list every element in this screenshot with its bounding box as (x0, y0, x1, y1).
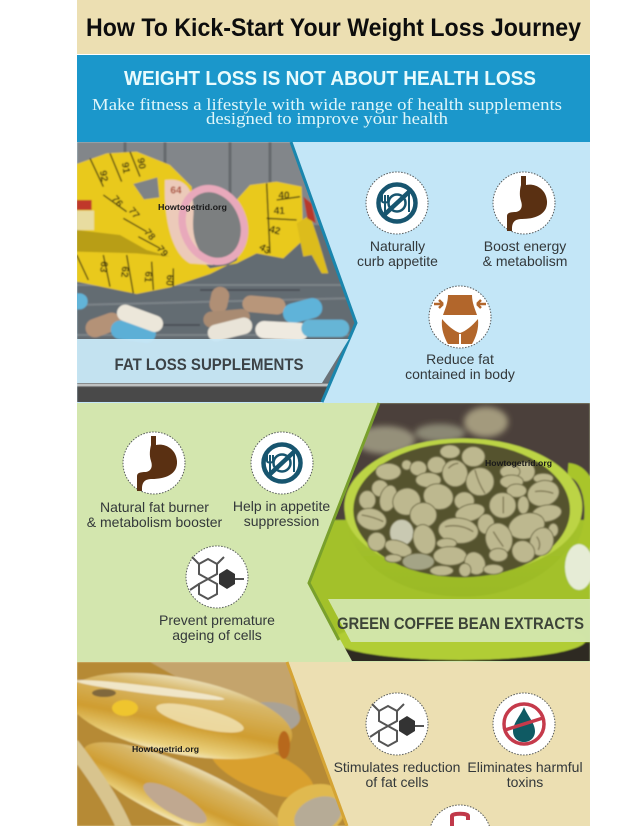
icon: no toxins drop (493, 693, 555, 755)
label: natural fat burner: & metabolism booster (87, 514, 223, 530)
watermark: Howtogetrid.org (132, 744, 199, 754)
photo border (287, 662, 347, 826)
header subtitle (92, 95, 562, 128)
icon: no eating plate (366, 172, 428, 234)
tape coordinates at 3x: 79 (154, 244, 170, 260)
label: help in appetite: Help in appetite (233, 498, 330, 514)
label: naturally curb appetite: Naturally (370, 238, 425, 254)
title: How To Kick-Start Your Weight Loss Journey (86, 14, 581, 42)
tape coordinates at 3x: 61 (141, 271, 153, 283)
label: help in appetite: suppression (244, 513, 319, 529)
tape coordinates at 3x: 76 (109, 194, 125, 210)
tape coordinates at 3x: 64 (170, 185, 182, 196)
label: stimulates reduction: of fat cells (365, 774, 429, 790)
label: boost energy: Boost energy (484, 238, 566, 254)
label: eliminates harmful: Eliminates harmful (467, 759, 583, 775)
banner: fat loss supplements: FAT LOSS SUPPLEMENTS (114, 355, 304, 374)
tape coordinates at 3x: 92 (97, 170, 110, 183)
header band (77, 55, 590, 142)
icon: stomach (493, 172, 555, 234)
tape coordinates at 3x: 77 (126, 206, 142, 222)
label: boost energy: & metabolism (483, 253, 567, 269)
label: eliminates harmful: toxins (507, 774, 543, 790)
banner: fat loss supplements (77, 339, 349, 383)
title band (77, 0, 590, 54)
label: prevent premature: Prevent premature (159, 612, 275, 628)
cup coordinates at 3x (344, 438, 582, 597)
icon: no eating plate (251, 432, 313, 494)
tape coordinates at 3x: 43 (257, 242, 273, 257)
tape coordinates at 3x: 63 (97, 261, 109, 273)
tape coordinates at 3x: 42 (268, 224, 282, 238)
pills (66, 285, 349, 344)
tape coordinates at 3x: 62 (118, 266, 130, 278)
label: naturally curb appetite: curb appetite (357, 253, 438, 269)
panel: fish oil (61, 657, 590, 826)
label: reduce fat: contained in body (405, 366, 515, 382)
photo: measuring tape and pills (66, 142, 367, 403)
photo border (309, 403, 379, 640)
photo: golden oil capsules (77, 662, 346, 826)
tape coordinates at 3x: 91 (119, 161, 132, 175)
banner: green coffee bean extracts (328, 599, 590, 642)
watermark: Howtogetrid.org (485, 458, 552, 468)
panel: green coffee bean extracts (77, 403, 593, 663)
icon: stomach (123, 432, 185, 494)
label: reduce fat: Reduce fat (426, 351, 494, 367)
icon: waist (429, 286, 491, 348)
label: natural fat burner: Natural fat burner (100, 499, 209, 515)
tape coordinates at 3x: 90 (134, 157, 147, 170)
icon: molecule (366, 693, 428, 755)
label: prevent premature: ageing of cells (172, 627, 262, 643)
photo: green coffee beans in a cup (300, 403, 593, 663)
panel: fat loss supplements (66, 142, 590, 403)
photo border (291, 142, 356, 402)
banner: green coffee bean extracts: GREEN COFFEE BEAN EXTRACTS (337, 615, 584, 633)
header subtitle: designed to improve your health (206, 109, 449, 128)
icon: molecule (186, 546, 248, 608)
tape coordinates at 3x: 60 (163, 274, 175, 287)
watermark: Howtogetrid.org (158, 202, 227, 212)
label: stimulates reduction: Stimulates reduction (334, 759, 460, 775)
header heading: WEIGHT LOSS IS NOT ABOUT HEALTH LOSS (124, 68, 536, 90)
icon: partially visible next icon (429, 805, 491, 826)
header subtitle: Make fitness a lifestyle with wide range of health supplements (92, 95, 562, 114)
tape coordinates at 3x: 40 (278, 191, 290, 202)
tape coordinates at 3x: 78 (141, 227, 157, 243)
tape coordinates at 3x (77, 152, 328, 294)
tape coordinates at 3x: 41 (274, 206, 285, 217)
